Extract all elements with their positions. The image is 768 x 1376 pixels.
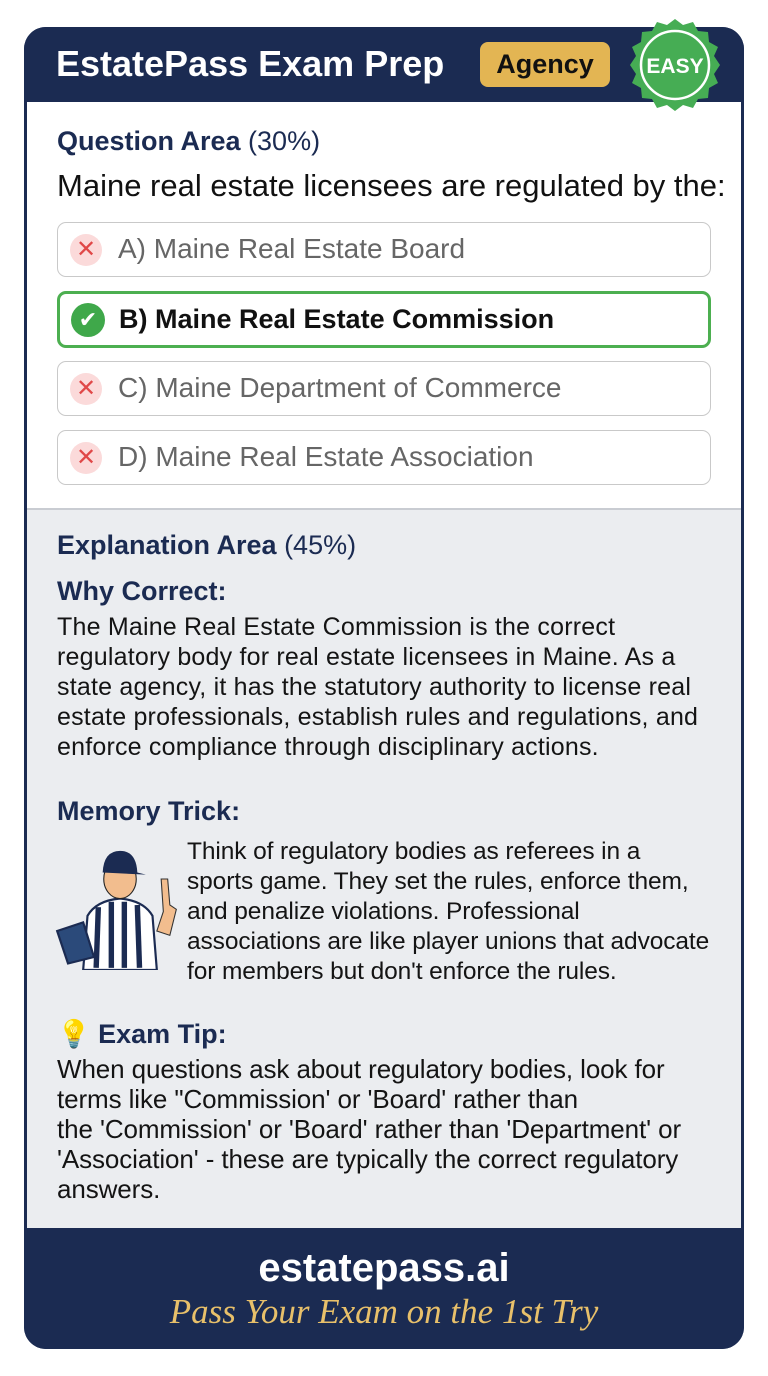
option B correct: ✔ — [79, 307, 97, 332]
explanation heading: Explanation Area (45%) — [57, 530, 356, 560]
tagline: Pass Your Exam on the 1st Try — [170, 1292, 598, 1331]
option B correct — [57, 291, 711, 348]
exam tip text: 'Association' - these are typically the correct regulatory — [57, 1144, 678, 1174]
option C: ✕ — [76, 375, 96, 402]
memory trick text: sports game. They set the rules, enforce them, — [187, 868, 689, 895]
option D: ✕ — [76, 444, 96, 471]
memory trick text: associations are like player unions that advocate — [187, 928, 709, 955]
badge: EASY: EASY — [646, 55, 704, 78]
option A — [57, 222, 711, 277]
option D — [57, 430, 711, 485]
badge: Agency — [480, 42, 610, 87]
question text: Maine real estate licensees are regulated by the: — [57, 168, 726, 203]
exam tip text: terms like "Commission' or 'Board' rather than — [57, 1084, 578, 1114]
memory trick text: Think of regulatory bodies as referees in a — [187, 838, 640, 865]
question area — [27, 102, 741, 508]
footer — [24, 1228, 744, 1349]
explanation area — [27, 508, 741, 1228]
badge: EASY — [630, 19, 720, 111]
option B correct: B) Maine Real Estate Commission — [119, 304, 554, 334]
exam tip text: When questions ask about regulatory bodies, look for — [57, 1054, 665, 1084]
icon: referee — [56, 850, 177, 970]
memory trick text: for members but don't enforce the rules. — [187, 958, 617, 985]
title: EstatePass Exam Prep — [56, 43, 444, 84]
option D: D) Maine Real Estate Association — [118, 441, 534, 472]
option C: C) Maine Department of Commerce — [118, 372, 561, 403]
exam tip text — [57, 1054, 681, 1204]
why correct text: estate professionals, establish rules and regulations, and — [57, 703, 698, 731]
badge: Agency: Agency — [496, 49, 594, 79]
question heading: Question Area (30%) — [57, 126, 320, 156]
option C — [57, 361, 711, 416]
why correct text: The Maine Real Estate Commission is the correct — [57, 613, 615, 641]
exam tip heading: 💡 Exam Tip: — [57, 1019, 227, 1049]
why correct text: enforce compliance through disciplinary actions. — [57, 733, 599, 761]
exam tip text: answers. — [57, 1174, 160, 1204]
memory trick heading: Memory Trick: — [57, 796, 240, 826]
memory trick text: and penalize violations. Professional — [187, 898, 580, 925]
why correct text: regulatory body for real estate licensees in Maine. As a — [57, 643, 675, 671]
exam tip text: the 'Commission' or 'Board' rather than 'Department' or — [57, 1114, 681, 1144]
option A: ✕ — [76, 236, 96, 263]
option A: A) Maine Real Estate Board — [118, 233, 465, 264]
header — [24, 27, 744, 102]
memory trick text — [187, 838, 709, 985]
why correct text: state agency, it has the statutory authority to license real — [57, 673, 691, 701]
why correct heading: Why Correct: — [57, 576, 227, 606]
why correct text — [57, 613, 698, 761]
footer url: estatepass.ai — [258, 1246, 510, 1290]
